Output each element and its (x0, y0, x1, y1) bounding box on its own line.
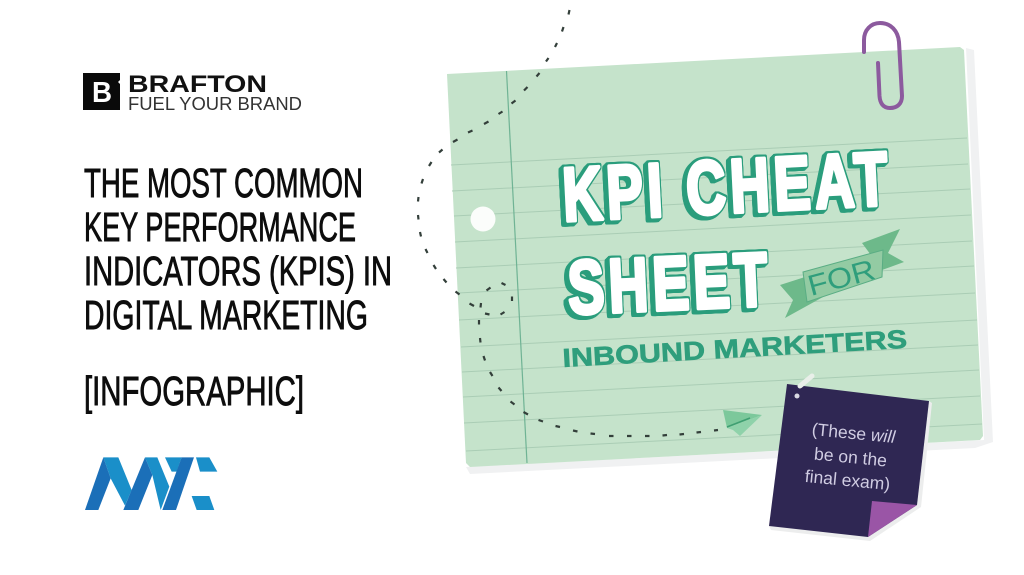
sticky note (769, 376, 932, 541)
purple folded corner (868, 501, 917, 537)
icon: Brafton B mark (83, 73, 120, 110)
logo: Brafton (83, 71, 302, 114)
paperclip (864, 23, 902, 108)
logo: MT (85, 457, 217, 510)
subtitle: infographic tag: [INFOGRAPHIC] (84, 368, 304, 414)
margin line (506, 71, 527, 463)
panel: lined green paper (447, 47, 983, 467)
note text (804, 419, 897, 494)
paper shadow (466, 48, 993, 474)
heading: KPI Cheat Sheet (561, 137, 894, 331)
note text: (These will (811, 419, 897, 447)
subheading: Inbound Marketers: INBOUND MARKETERS (562, 324, 908, 373)
heading: KPI Cheat Sheet: SHEET (566, 237, 774, 331)
title: KEY PERFORMANCE (84, 204, 356, 250)
sticky note shadow (769, 401, 932, 541)
brand name: BRAFTON (128, 71, 267, 98)
note text: be on the (813, 444, 888, 470)
punched hole (470, 206, 496, 232)
title: INDICATORS (KPIS) IN (84, 248, 392, 294)
ribbon: FOR: FOR (805, 254, 878, 303)
icon: paper plane (723, 410, 762, 436)
note text: final exam) (804, 466, 891, 494)
heading: KPI Cheat Sheet: KPI CHEAT (561, 137, 894, 238)
title: DIGITAL MARKETING (84, 292, 368, 338)
dashed flight path arrow (418, 10, 718, 436)
brand tagline: FUEL YOUR BRAND (128, 94, 302, 114)
pin (794, 376, 812, 398)
ribbon: FOR (780, 229, 904, 318)
title: THE MOST COMMON (84, 160, 363, 206)
icon: Brafton B mark: B (92, 77, 112, 109)
title (84, 160, 392, 338)
